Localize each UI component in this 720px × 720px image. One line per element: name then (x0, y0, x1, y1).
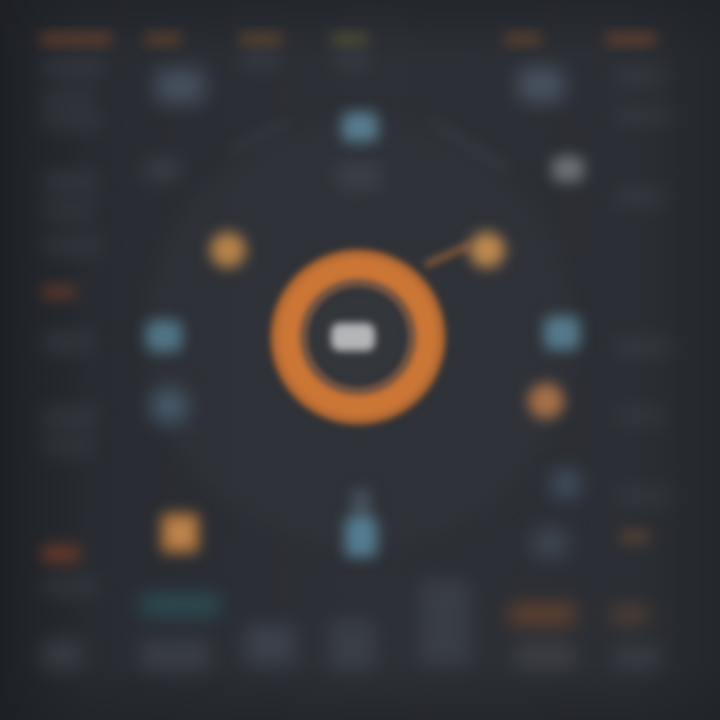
node: blue left lower (152, 390, 186, 422)
node: blue left upper (146, 320, 182, 352)
node: right lower grey-blue (552, 470, 580, 498)
node: orange right (469, 232, 505, 268)
arrow: ring to orange node (425, 245, 470, 265)
node: blue right (544, 316, 580, 350)
node: bottom blue (345, 490, 377, 557)
ring body (289, 268, 427, 406)
right text column (615, 70, 670, 669)
central orange ring (276, 255, 440, 419)
node: orange left (210, 232, 246, 268)
ring inner highlight (305, 284, 411, 390)
center label pill (331, 323, 375, 351)
diagonal connector lines (230, 120, 510, 170)
left red-orange accents (42, 285, 650, 563)
node: top blue (342, 112, 378, 142)
node: orange lower right (528, 383, 564, 419)
top sub-blocks (145, 55, 564, 187)
central backdrop disc (145, 120, 575, 550)
ring center (312, 291, 404, 383)
node: orange bottom left (161, 513, 199, 553)
top heading labels (40, 33, 656, 45)
node: right bottom grey (532, 528, 568, 558)
node: top right grey (552, 156, 584, 182)
left text column (42, 60, 104, 670)
ring outer shade (276, 255, 440, 419)
bottom row panels (140, 580, 648, 670)
